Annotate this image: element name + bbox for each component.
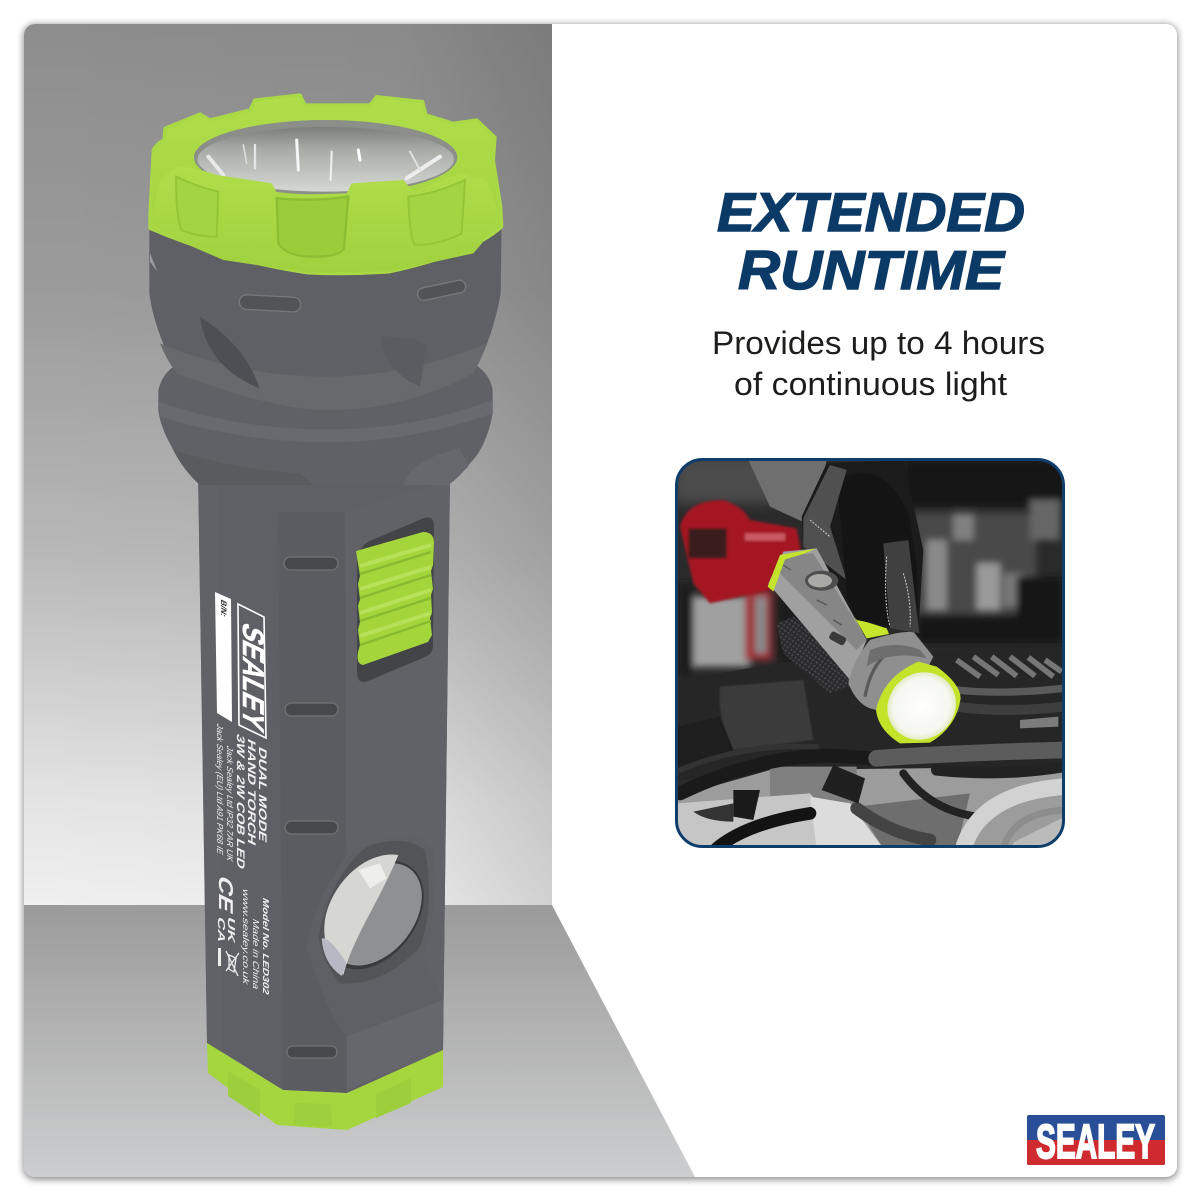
printed SEALEY logo: SEALEY xyxy=(236,618,270,737)
heading: extended runtime xyxy=(717,181,1025,301)
wiring harness xyxy=(680,746,1063,848)
photo border xyxy=(676,460,1064,846)
engine bay surface xyxy=(677,767,1065,848)
red hoist xyxy=(680,500,803,603)
dark rubber block xyxy=(719,680,813,750)
body text xyxy=(712,325,1045,402)
grey head xyxy=(149,220,502,410)
printed product text: www.sealey.co.uk xyxy=(241,886,251,987)
body text: Provides up to 4 hours xyxy=(712,325,1045,361)
green slide switch xyxy=(356,532,434,665)
body text: of continuous light xyxy=(734,366,1007,402)
scene background xyxy=(678,461,1062,786)
printed product text: CE xyxy=(214,872,236,917)
gloved top hand base xyxy=(748,460,923,633)
bezel front crenellations xyxy=(150,167,502,273)
printed product text: DUAL MODE xyxy=(256,745,268,845)
panel: grey studio floor xyxy=(24,905,695,1177)
torch head xyxy=(149,95,502,485)
printed product text: Made in China xyxy=(251,917,261,992)
printed product text: Model No. LED302 xyxy=(261,896,271,997)
printed B/N label xyxy=(215,592,232,722)
connectors xyxy=(822,765,865,803)
panel: grey studio wall xyxy=(24,24,552,906)
product: hand torch xyxy=(149,95,502,1130)
torch body xyxy=(198,470,450,1130)
printed B/N label: B/N: xyxy=(219,598,229,619)
engine cover slats xyxy=(957,657,1062,677)
grey collar and lower head xyxy=(158,363,493,485)
engine cover and mid shadow xyxy=(723,664,773,673)
grip slots xyxy=(284,557,338,1058)
reflector opening xyxy=(194,120,457,195)
green end cap xyxy=(207,1043,443,1130)
printed product text xyxy=(214,722,271,997)
heading: extended runtime: RUNTIME xyxy=(738,239,1006,301)
switch recess xyxy=(357,517,434,682)
printed product text: UK xyxy=(225,915,237,946)
WEEE symbol xyxy=(218,948,239,976)
gloved lower hand xyxy=(777,617,857,693)
lens recess xyxy=(304,836,444,1090)
blurred workshop background xyxy=(677,460,1067,677)
head slots xyxy=(239,279,467,312)
green bezel ring xyxy=(150,95,502,274)
photo torch head xyxy=(848,632,933,717)
head grip leaf marks xyxy=(150,253,427,388)
printed product text: CA xyxy=(215,915,227,946)
photo: torch in use over engine bay xyxy=(670,450,1070,853)
glove fingers over torch xyxy=(803,465,919,633)
printed product text: Jack Sealey Ltd IP32 7AR UK xyxy=(225,744,235,864)
heading: extended runtime: EXTENDED xyxy=(717,181,1025,243)
bezel recess panels xyxy=(176,177,465,257)
printed product text: Jack Sealey (EU) Ltd A91 PK68 IE xyxy=(215,722,225,857)
printed product text: 3W & 2W COB LED xyxy=(234,732,246,872)
printed product text: HAND TORCH xyxy=(245,737,257,848)
spot lens xyxy=(304,842,444,988)
mini torch in photo xyxy=(768,548,970,754)
